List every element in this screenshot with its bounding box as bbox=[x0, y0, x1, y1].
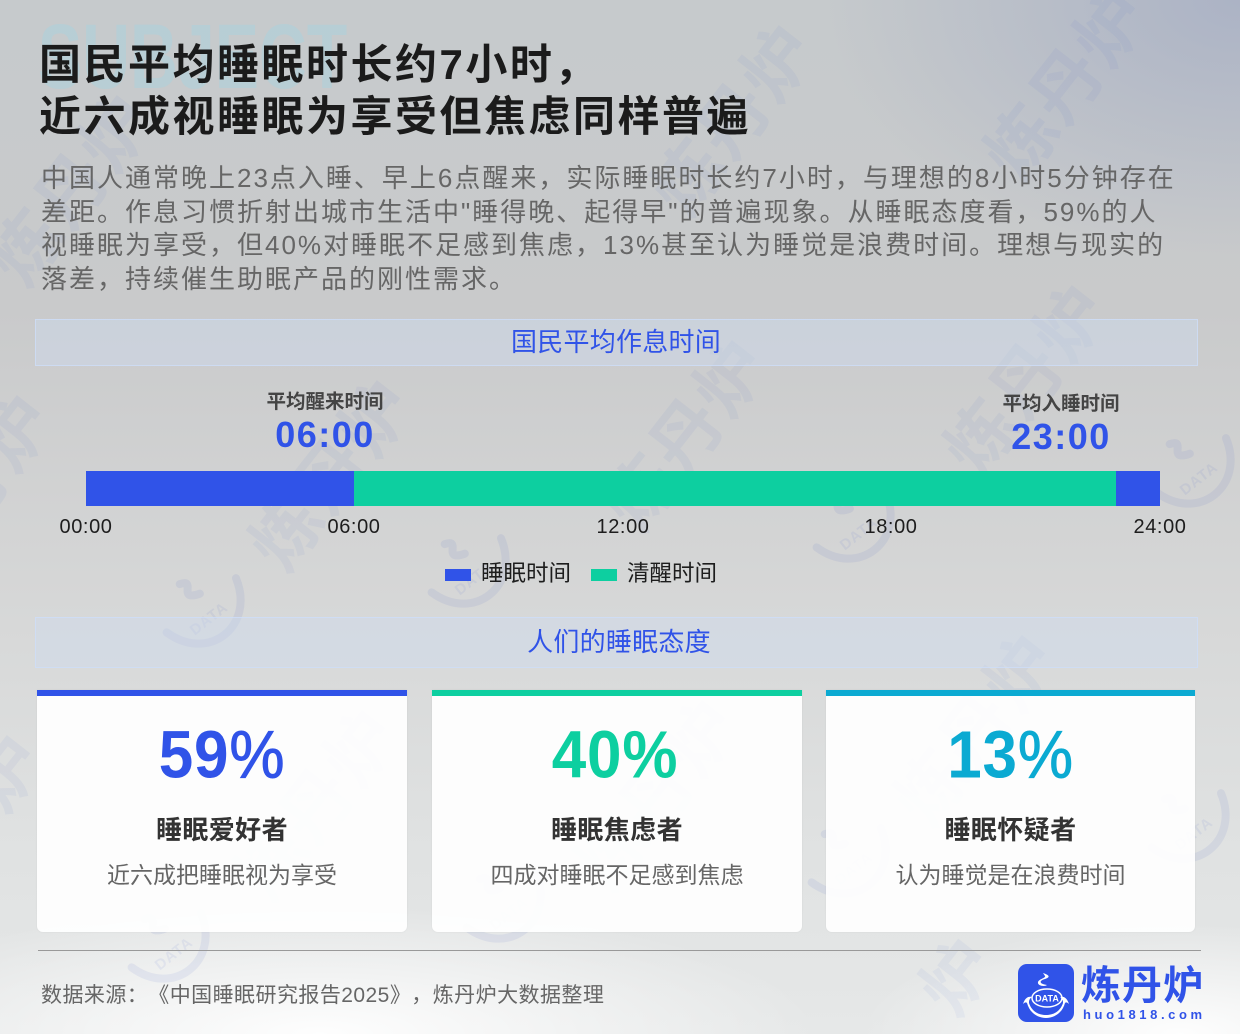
footer divider bbox=[38, 950, 1201, 951]
background watermarks: DATA bbox=[152, 934, 196, 974]
brand url: huo1818.com bbox=[1083, 1007, 1206, 1022]
card: sleep skeptics: 睡眠怀疑者 bbox=[944, 815, 1076, 845]
background watermarks: 炼丹炉 bbox=[867, 611, 1080, 843]
callout: wake time bbox=[266, 391, 384, 455]
title: 近六成视睡眠为享受但焦虑同样普遍 bbox=[39, 93, 751, 140]
card: sleep skeptics bbox=[826, 690, 1195, 932]
brand name: 炼丹炉 bbox=[1081, 964, 1204, 1008]
title bbox=[39, 41, 751, 140]
legend: 清醒时间 bbox=[627, 561, 717, 586]
callout: wake time: 06:00 bbox=[275, 414, 375, 455]
callout: sleep time: 23:00 bbox=[1011, 416, 1111, 457]
background watermarks: 炼丹炉 bbox=[917, 261, 1130, 493]
callout: wake time: 平均醒来时间 bbox=[266, 391, 384, 413]
card: sleep worriers: 睡眠焦虑者 bbox=[551, 815, 683, 845]
section header: schedule bbox=[35, 319, 1198, 366]
intro text: 差距。作息习惯折射出城市生活中"睡得晚、起得早"的普遍现象。从睡眠态度看，59%的人 bbox=[41, 197, 1158, 227]
card: sleep worriers bbox=[432, 690, 802, 932]
timeline axis labels: 00:00 bbox=[59, 516, 113, 538]
card: sleep worriers: 四成对睡眠不足感到焦虑 bbox=[490, 862, 744, 888]
card: sleep skeptics: 认为睡觉是在浪费时间 bbox=[896, 862, 1126, 888]
background watermarks: 炼丹炉 bbox=[624, 1, 837, 233]
background watermarks: DATA bbox=[837, 514, 881, 554]
background watermarks: 炼丹炉 bbox=[222, 356, 435, 588]
timeline axis labels: 12:00 bbox=[596, 516, 650, 538]
intro text: 落差，持续催生助眠产品的刚性需求。 bbox=[41, 264, 517, 294]
background watermarks: DATA bbox=[187, 599, 231, 639]
timeline axis labels: 06:00 bbox=[327, 516, 381, 538]
background watermarks: 炉 bbox=[892, 914, 1016, 1033]
background watermarks: 炼丹炉 bbox=[207, 686, 420, 918]
background watermarks: DATA bbox=[452, 559, 496, 599]
intro text: 中国人通常晚上23点入睡、早上6点醒来，实际睡眠时长约7小时，与理想的8小时5分钟存在 bbox=[41, 163, 1176, 193]
timeline axis labels bbox=[59, 516, 1187, 538]
card: sleep lovers bbox=[37, 690, 407, 932]
background watermarks: DATA bbox=[1177, 459, 1221, 499]
background watermarks: 炼丹炉 bbox=[577, 316, 790, 548]
background watermarks: DATA bbox=[1172, 814, 1216, 854]
background watermarks: 炼丹炉 bbox=[547, 676, 760, 908]
icon: brand logo: DATA bbox=[1035, 994, 1059, 1004]
card: sleep lovers: 睡眠爱好者 bbox=[156, 815, 288, 845]
section header: attitudes bbox=[35, 617, 1198, 668]
section heading: schedule: 国民平均作息时间 bbox=[511, 327, 721, 357]
card: sleep skeptics: 13% bbox=[947, 718, 1074, 793]
intro text: 视睡眠为享受，但40%对睡眠不足感到焦虑，13%甚至认为睡觉是浪费时间。理想与现实的 bbox=[41, 230, 1165, 260]
background watermarks: DATA bbox=[832, 849, 876, 889]
callout: sleep time: 平均入睡时间 bbox=[1002, 393, 1120, 415]
card: sleep lovers: 59% bbox=[159, 718, 285, 793]
timeline bar bbox=[86, 471, 1160, 506]
section heading: attitudes: 人们的睡眠态度 bbox=[527, 627, 711, 657]
source note: 数据来源：《中国睡眠研究报告2025》，炼丹炉大数据整理 bbox=[41, 984, 604, 1007]
legend bbox=[445, 561, 717, 586]
card: sleep worriers: 40% bbox=[552, 718, 678, 793]
background watermarks: DATA bbox=[487, 894, 531, 934]
timeline axis labels: 18:00 bbox=[864, 516, 918, 538]
title: 国民平均睡眠时长约7小时， bbox=[39, 41, 599, 88]
card: sleep lovers: 近六成把睡眠视为享受 bbox=[107, 862, 337, 888]
callout: sleep time bbox=[1002, 393, 1120, 457]
timeline axis labels: 24:00 bbox=[1133, 516, 1187, 538]
background ghost word: SUBJECT bbox=[38, 6, 347, 108]
intro text bbox=[41, 163, 1176, 294]
legend: 睡眠时间 bbox=[481, 561, 571, 586]
icon: brand logo bbox=[1018, 964, 1074, 1022]
